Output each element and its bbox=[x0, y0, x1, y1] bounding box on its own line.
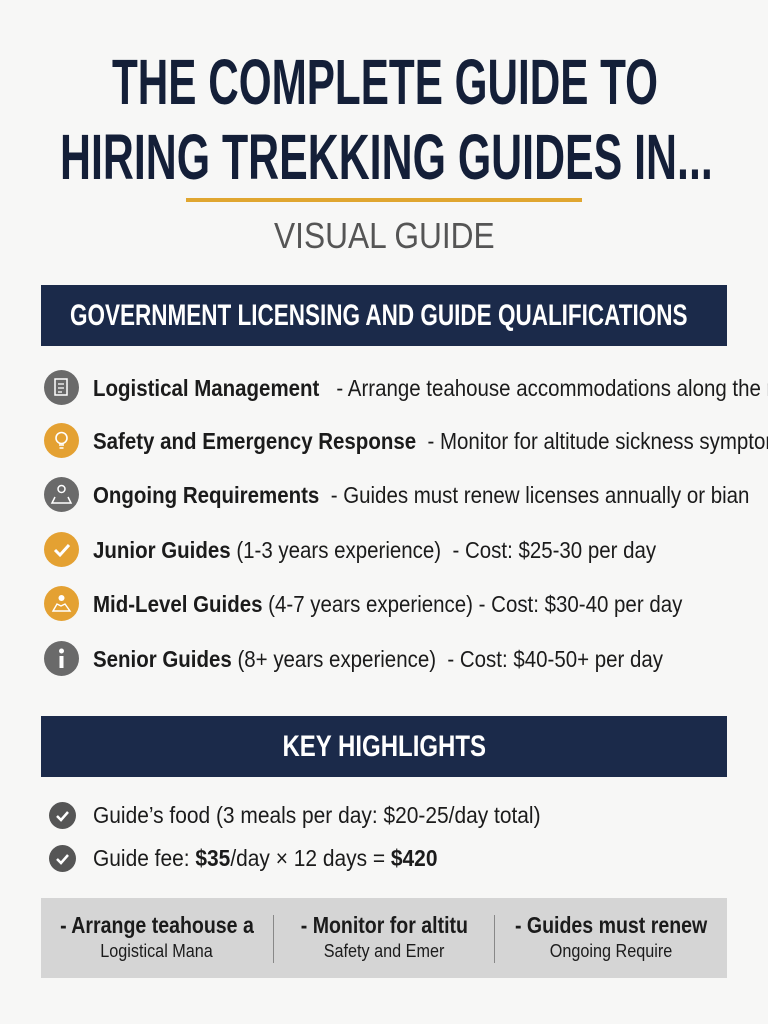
row: ongoing: Ongoing Requirements - Guides must renew licenses annually or bian bbox=[93, 482, 749, 508]
cell: logistical bbox=[60, 912, 254, 961]
summary box bbox=[41, 898, 727, 978]
cell: ongoing bbox=[515, 912, 708, 961]
banner: government licensing bbox=[41, 285, 727, 346]
row: safety bbox=[44, 423, 768, 458]
highlight: fee: Guide fee: $35/day × 12 days = $420 bbox=[93, 845, 437, 871]
row: senior: Senior Guides (8+ years experience) - Cost: $40-50+ per day bbox=[93, 646, 663, 672]
row: junior bbox=[44, 532, 656, 567]
row: junior: Junior Guides (1-3 years experience) - Cost: $25-30 per day bbox=[93, 537, 656, 563]
row: senior bbox=[44, 641, 663, 676]
cell: logistical: Logistical Mana bbox=[101, 941, 213, 961]
row: ongoing bbox=[44, 477, 749, 512]
gold underline bbox=[186, 198, 582, 202]
highlight: food: Guide’s food (3 meals per day: $20-25/day total) bbox=[93, 802, 541, 828]
list: qualifications bbox=[44, 370, 768, 676]
row: mid bbox=[44, 586, 682, 621]
cell: safety: Safety and Emer bbox=[324, 941, 444, 961]
list: highlights bbox=[49, 802, 541, 872]
row: mid: Mid-Level Guides (4-7 years experience) - Cost: $30-40 per day bbox=[93, 591, 682, 617]
title bbox=[60, 46, 713, 190]
banner: government licensing: GOVERNMENT LICENSING AND GUIDE QUALIFICATIONS bbox=[70, 299, 688, 332]
row: logistical bbox=[44, 370, 768, 405]
cell: ongoing: Ongoing Require bbox=[550, 941, 672, 961]
title: THE COMPLETE GUIDE TO bbox=[112, 46, 658, 118]
cell: safety: - Monitor for altitu bbox=[300, 912, 468, 938]
subtitle: VISUAL GUIDE bbox=[274, 215, 494, 256]
banner: key highlights: KEY HIGHLIGHTS bbox=[282, 730, 486, 763]
banner: key highlights bbox=[41, 716, 727, 777]
cell: logistical: - Arrange teahouse a bbox=[60, 912, 254, 938]
cell: ongoing: - Guides must renew bbox=[515, 912, 707, 938]
cell: safety bbox=[300, 912, 468, 961]
